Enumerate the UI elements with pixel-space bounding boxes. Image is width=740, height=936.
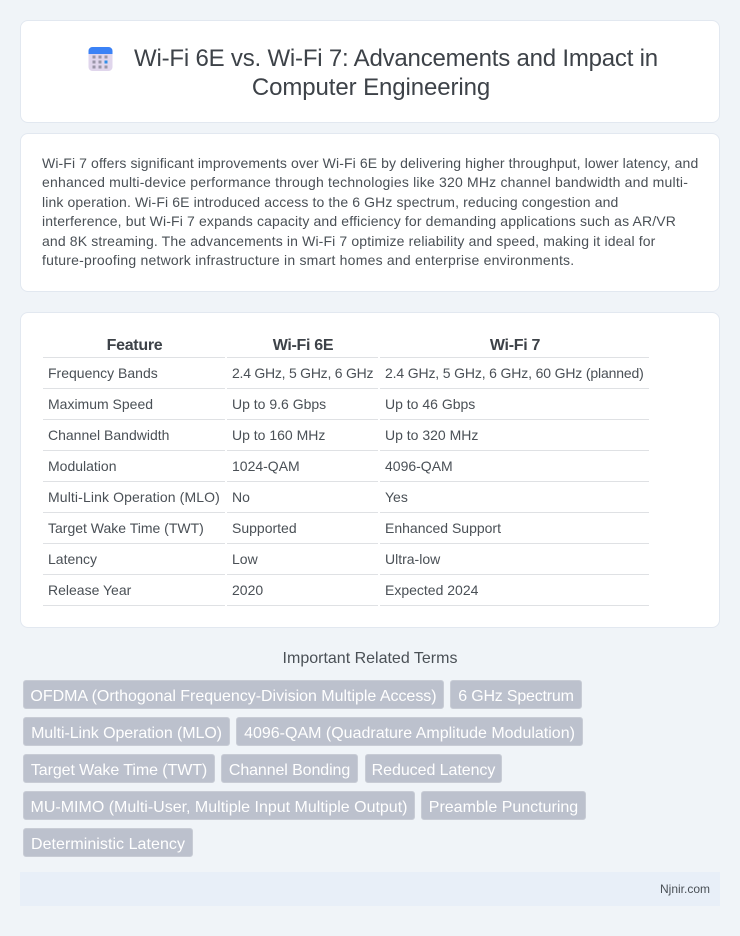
related terms chips: Target Wake Time (TWT) [31,762,207,779]
heading: related terms: Important Related Terms [283,650,457,667]
table: feature comparison: Channel Bandwidth [48,427,169,443]
table: feature comparison: No [232,489,250,505]
table: feature comparison: Enhanced Support [385,520,501,536]
text block: summary: enhanced multi-device performance through technologies like 320 MHz channel bandwidth and multi- [42,174,688,190]
table: feature comparison: Ultra-low [385,551,440,567]
related terms chips: 4096-QAM (Quadrature Amplitude Modulation) [244,725,575,742]
related terms chips: Channel Bonding [229,762,350,779]
table: feature comparison: Target Wake Time (TWT) [48,520,204,536]
related terms chips: OFDMA (Orthogonal Frequency-Division Multiple Access) [30,688,437,705]
table: feature comparison: Up to 320 MHz [385,427,478,443]
table: feature comparison: Low [232,551,258,567]
table: feature comparison: 1024-QAM [232,458,300,474]
related terms chips: MU-MIMO (Multi-User, Multiple Input Multiple Output) [30,799,407,816]
text block: summary: future-proofing network infrastructure in smart homes and enterprise environments. [42,252,574,268]
title: Computer Engineering [252,74,490,101]
panel: comparison table [20,312,720,628]
table: feature comparison: Wi-Fi 6E [273,337,333,354]
footer [20,872,720,906]
table: feature comparison: Frequency Bands [48,365,158,381]
text block: summary: interference, but Wi-Fi 7 expands capacity and efficiency for demanding applications such as AR/VR [42,213,676,229]
icon: calendar grid [88,47,112,71]
related terms chips: 6 GHz Spectrum [458,688,574,705]
table: feature comparison: Expected 2024 [385,582,478,598]
table: feature comparison: Up to 9.6 Gbps [232,396,326,412]
text block: summary: Wi-Fi 7 offers significant improvements over Wi-Fi 6E by delivering higher throughput, lower latency, and [42,155,698,171]
table: feature comparison: Latency [48,551,97,567]
related terms chips [23,680,586,857]
table: feature comparison: Up to 46 Gbps [385,396,475,412]
table: feature comparison: 4096-QAM [385,458,453,474]
table: feature comparison: Multi-Link Operation (MLO) [48,489,220,505]
table: feature comparison [43,337,649,606]
table: feature comparison: Feature [107,337,162,354]
table: feature comparison: Supported [232,520,297,536]
table: feature comparison: Wi-Fi 7 [490,337,540,354]
related terms chips: Multi-Link Operation (MLO) [31,725,222,742]
related terms chips: Reduced Latency [372,762,495,779]
table: feature comparison: Up to 160 MHz [232,427,325,443]
table: feature comparison: Release Year [48,582,131,598]
related terms chips: Deterministic Latency [31,836,185,853]
table: feature comparison: 2.4 GHz, 5 GHz, 6 GHz, 60 GHz (planned) [385,365,644,381]
title: Wi-Fi 6E vs. Wi-Fi 7: Advancements and Impact in [134,45,658,72]
table: feature comparison: 2.4 GHz, 5 GHz, 6 GHz [232,365,373,381]
table: feature comparison: Yes [385,489,408,505]
table: feature comparison: Maximum Speed [48,396,153,412]
panel: introduction paragraph [20,133,720,292]
table: feature comparison: 2020 [232,582,263,598]
table: feature comparison: Modulation [48,458,116,474]
panel: title header [20,20,720,123]
text block: summary: link operation. Wi-Fi 6E introduced access to the 6 GHz spectrum, reducing congestion and [42,194,618,210]
footer credit: Njnir.com [660,882,710,896]
text block: summary [42,155,698,268]
related terms chips: Preamble Puncturing [429,799,578,816]
text block: summary: and 8K streaming. The advancements in Wi-Fi 7 optimize reliability and speed, making it ideal for [42,233,655,249]
title [134,45,658,101]
